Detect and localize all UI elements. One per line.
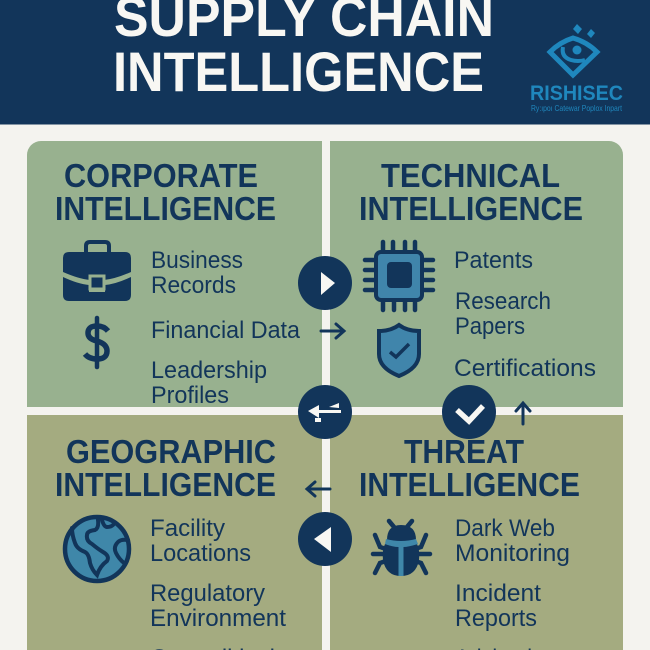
list: corporate items: Profiles — [151, 382, 229, 409]
title — [113, 0, 494, 103]
connector: swap — [298, 385, 352, 439]
heading: corporate: CORPORATE — [64, 157, 258, 194]
list: technical items — [454, 247, 596, 382]
list: threat items: Dark Web — [455, 515, 555, 542]
list: corporate items: Business — [151, 247, 243, 274]
logo: Rishisec — [530, 24, 623, 113]
logo: Rishisec: Ry:ıpoı Catewar Poplox Inpart — [531, 103, 623, 113]
heading: threat: THREAT — [404, 433, 524, 470]
list: threat items: Reports — [455, 605, 537, 632]
logo: Rishisec: RISHISEC — [530, 82, 623, 105]
list: geographic items: Regulatory — [150, 580, 265, 607]
list: technical items: Patents — [454, 247, 533, 274]
list: threat items: Incident — [455, 580, 541, 607]
connector: check — [442, 385, 496, 439]
heading: technical — [359, 157, 583, 227]
connector: left — [298, 512, 352, 566]
heading: geographic: GEOGRAPHIC — [66, 433, 276, 470]
panel: technical intelligence — [330, 141, 623, 407]
icon: briefcase — [63, 242, 131, 301]
icon: globe — [65, 517, 129, 581]
arrow: right small — [321, 324, 344, 338]
arrow: up small — [516, 403, 530, 424]
list: technical items: Research — [455, 288, 551, 315]
list: corporate items — [151, 247, 301, 409]
list: geographic items: Facility — [150, 515, 225, 542]
list: technical items: Certifications — [454, 355, 596, 382]
panel: geographic intelligence — [27, 415, 322, 650]
heading: corporate: INTELLIGENCE — [55, 190, 276, 227]
arrow: left small — [307, 482, 330, 496]
list: corporate items: Records — [151, 272, 236, 299]
heading: geographic — [55, 433, 276, 503]
icon: chip — [365, 242, 433, 310]
list: technical items: Papers — [455, 313, 525, 340]
connector: right — [298, 256, 352, 310]
icon: dollar sign — [85, 318, 108, 367]
list: threat items — [455, 515, 570, 650]
panel: corporate intelligence — [27, 141, 322, 409]
icon: shield — [379, 325, 419, 376]
list: geographic items: Locations — [150, 540, 251, 567]
heading: threat — [359, 433, 580, 503]
panel: threat intelligence — [330, 415, 623, 650]
icon: bug — [373, 521, 430, 576]
list: corporate items: Leadership — [151, 357, 267, 384]
title: INTELLIGENCE — [113, 40, 484, 103]
header banner — [0, 0, 650, 124]
heading: threat: INTELLIGENCE — [359, 466, 580, 503]
heading: geographic: INTELLIGENCE — [55, 466, 276, 503]
heading: technical: INTELLIGENCE — [359, 190, 583, 227]
heading: corporate — [55, 157, 276, 227]
list: threat items: Monitoring — [455, 540, 570, 567]
heading: technical: TECHNICAL — [381, 157, 560, 194]
list: corporate items: Financial Data — [151, 317, 301, 344]
list: geographic items: Environment — [150, 605, 286, 632]
list: geographic items — [150, 515, 286, 650]
